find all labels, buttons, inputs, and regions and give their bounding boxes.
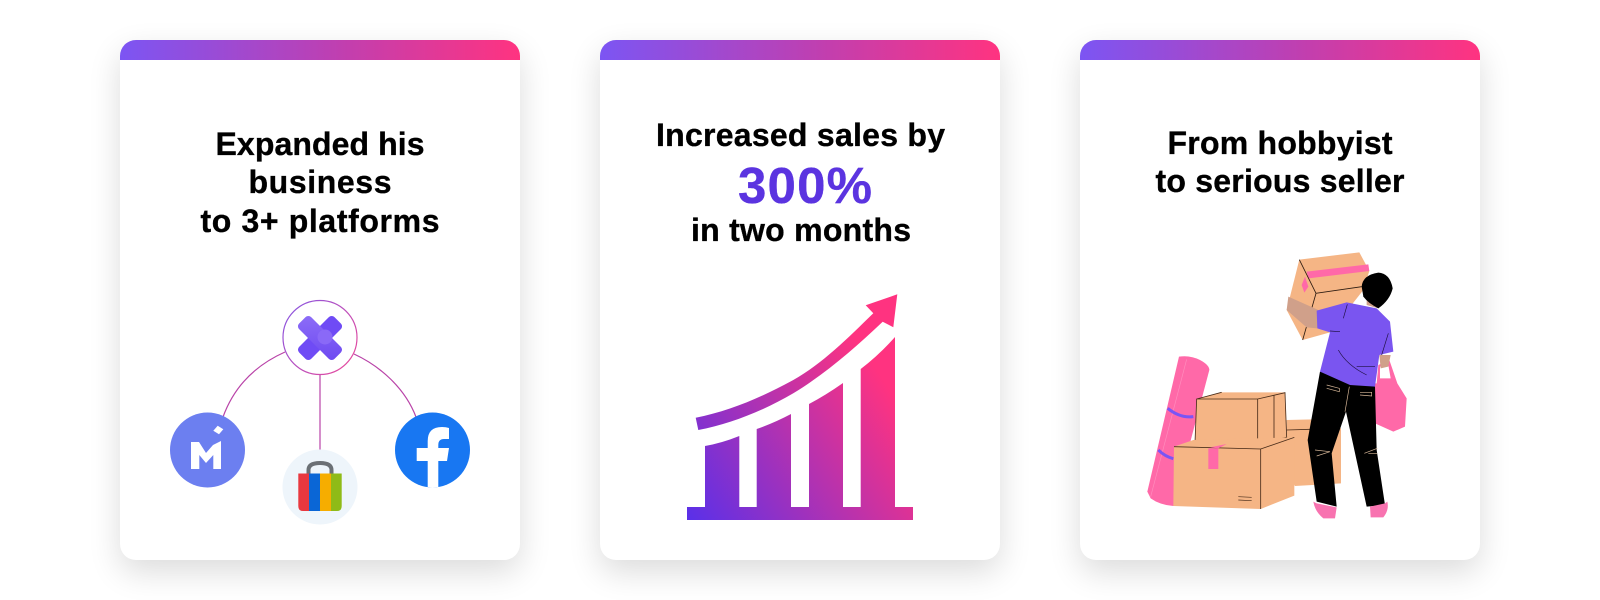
heading: expanded business: business bbox=[248, 164, 392, 200]
top box bbox=[1195, 392, 1287, 444]
carried box bbox=[1287, 252, 1369, 340]
rolled mat bbox=[1147, 356, 1209, 506]
legs bbox=[1308, 372, 1385, 507]
heading: hobbyist to seller bbox=[1156, 125, 1404, 199]
box tape bbox=[1208, 444, 1227, 469]
bottom box bbox=[1173, 437, 1294, 509]
heading: expanded business: Expanded his bbox=[216, 126, 424, 162]
icon: facebook bbox=[395, 412, 470, 488]
icon: central logo bbox=[283, 300, 357, 374]
shopping bag bbox=[1375, 360, 1407, 432]
arrow bbox=[696, 294, 897, 430]
arm bbox=[1287, 297, 1318, 328]
connector lines bbox=[223, 352, 416, 450]
icon: shopping bag bbox=[282, 450, 358, 524]
shirt bbox=[1317, 302, 1393, 387]
bars bbox=[687, 337, 913, 520]
diagram: platform network bbox=[170, 300, 470, 524]
heading: increased sales: 300% bbox=[738, 157, 872, 214]
head bbox=[1362, 273, 1393, 308]
illustration: person carrying boxes bbox=[1147, 252, 1407, 518]
neck bbox=[1367, 300, 1378, 308]
icon: M logo bbox=[170, 412, 245, 488]
heading: increased sales bbox=[656, 117, 945, 248]
back box bbox=[1287, 419, 1341, 486]
heading: increased sales: Increased sales by bbox=[656, 117, 945, 153]
jeans details bbox=[1315, 385, 1377, 456]
hand bbox=[1379, 355, 1391, 368]
heading: increased sales: in two months bbox=[691, 212, 911, 248]
chart: rising bars and arrow bbox=[687, 294, 913, 520]
panel: hobbyist bbox=[1080, 40, 1480, 560]
shoes bbox=[1313, 502, 1388, 518]
heading: expanded business bbox=[200, 126, 440, 239]
heading: hobbyist to seller: From hobbyist bbox=[1168, 125, 1393, 161]
panel: platforms bbox=[120, 40, 520, 560]
panel: sales bbox=[600, 40, 1000, 560]
heading: hobbyist to seller: to serious seller bbox=[1156, 163, 1404, 199]
heading: expanded business: to 3+ platforms bbox=[200, 203, 440, 239]
